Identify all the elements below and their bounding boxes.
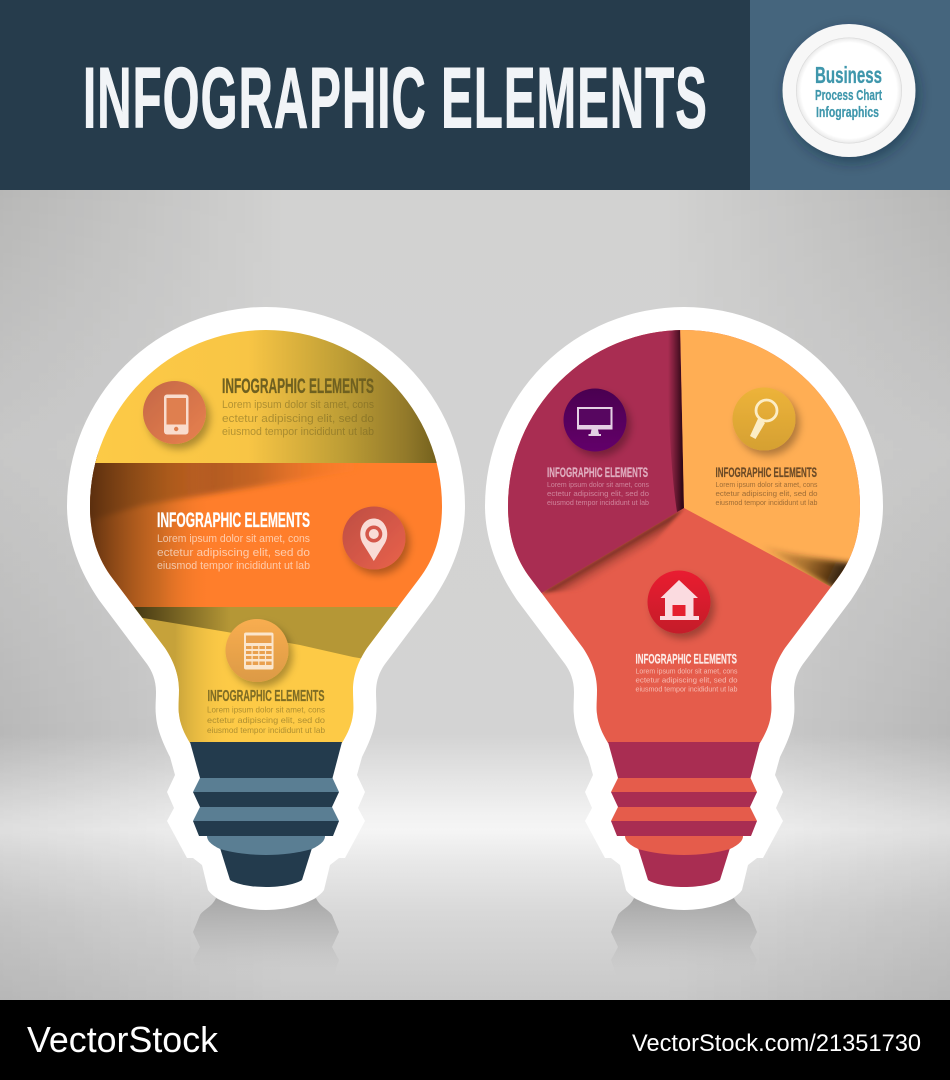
light bulb: right (485, 307, 883, 910)
text block: bottom (207, 688, 325, 735)
text block: middle: eiusmod tempor incididunt ut lab (157, 560, 310, 572)
text block: coral (636, 650, 738, 694)
segment: peach (680, 330, 860, 587)
footer band (0, 1000, 950, 1080)
text block: maroon: INFOGRAPHIC ELEMENTS (547, 464, 648, 480)
text block: middle: ectetur adipiscing elit, sed do (157, 547, 310, 559)
footer url: VectorStock.com/21351730 (632, 1030, 921, 1057)
text block: peach: eiusmod tempor incididunt ut lab (716, 498, 818, 507)
text block: peach: ectetur adipiscing elit, sed do (716, 489, 818, 498)
segment: orange band (85, 450, 450, 610)
header band (0, 0, 950, 190)
text block: peach: INFOGRAPHIC ELEMENTS (716, 464, 817, 480)
text block: coral: ectetur adipiscing elit, sed do (636, 676, 738, 684)
icon: calculator (226, 619, 288, 682)
footer logo: VectorStock (27, 1019, 219, 1060)
white sticker outline (67, 307, 465, 910)
text block: maroon: eiusmod tempor incididunt ut lab (547, 498, 649, 507)
lamp base (190, 742, 342, 887)
badge: business process chart infographics: Process Chart (815, 87, 882, 104)
text block: middle: INFOGRAPHIC ELEMENTS (157, 509, 310, 532)
icon: magnifying glass (732, 388, 796, 450)
segment: bottom yellow (134, 607, 398, 743)
segment: top yellow (85, 325, 450, 463)
segment: maroon (508, 330, 684, 593)
reflection: left bulb (193, 898, 339, 980)
text block: coral: INFOGRAPHIC ELEMENTS (636, 650, 737, 666)
icon: smartphone (143, 381, 206, 444)
text block: top: INFOGRAPHIC ELEMENTS (222, 375, 374, 398)
reflection: right bulb (611, 898, 757, 980)
text block: maroon (547, 464, 649, 507)
text block: middle (157, 509, 310, 572)
badge: business process chart infographics: Infographics (816, 104, 879, 121)
lamp base (608, 742, 760, 887)
text block: coral: Lorem ipsum dolor sit amet, cons (636, 666, 738, 676)
light bulb: left (67, 307, 465, 910)
text block: middle: Lorem ipsum dolor sit amet, cons (157, 533, 310, 545)
segment: coral (500, 320, 870, 750)
text block: top: Lorem ipsum dolor sit amet, cons (222, 399, 374, 411)
text block: maroon: ectetur adipiscing elit, sed do (547, 489, 649, 498)
text block: maroon: Lorem ipsum dolor sit amet, cons (547, 480, 649, 489)
background panel (0, 190, 950, 1000)
text block: top (222, 375, 374, 438)
text block: coral: eiusmod tempor incididunt ut lab (636, 684, 738, 694)
icon: house (648, 570, 710, 634)
text block: top: eiusmod tempor incididunt ut lab (222, 426, 374, 438)
text block: bottom: INFOGRAPHIC ELEMENTS (208, 688, 325, 705)
text block: bottom: eiusmod tempor incididunt ut lab (207, 725, 325, 735)
text block: peach (716, 464, 818, 507)
text block: bottom: ectetur adipiscing elit, sed do (207, 715, 325, 725)
badge: business process chart infographics (782, 24, 916, 157)
icon: map pin (342, 506, 406, 570)
text block: top: ectetur adipiscing elit, sed do (222, 413, 374, 425)
icon: monitor (564, 388, 626, 452)
text block: bottom: Lorem ipsum dolor sit amet, cons (207, 704, 325, 714)
badge: business process chart infographics: Business (815, 62, 882, 88)
white sticker outline (485, 307, 883, 910)
text block: peach: Lorem ipsum dolor sit amet, cons (716, 480, 818, 489)
